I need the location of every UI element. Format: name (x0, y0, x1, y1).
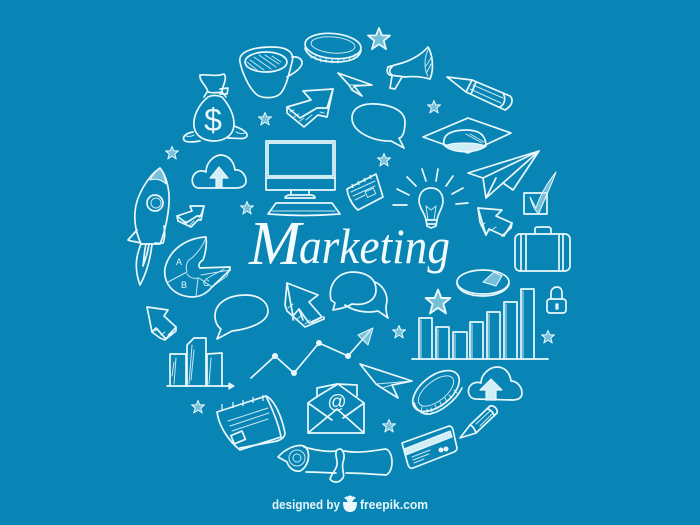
icon: pencil top right (447, 77, 512, 110)
title: Marketing: arketing (299, 218, 450, 274)
icon: ABC pie chart: B (181, 280, 187, 290)
icon: star big center right (426, 290, 450, 313)
line chart with arrow (251, 328, 373, 378)
icon: ABC pie chart (165, 237, 230, 297)
icon: freepik logo (343, 496, 357, 512)
icon: star under pencil (428, 100, 440, 113)
title: Marketing: M (248, 210, 304, 278)
icon: credit card (402, 426, 457, 468)
icon: pencil bottom (460, 406, 497, 438)
icon: star near bulb (378, 154, 390, 166)
icon: star bottom small (192, 400, 204, 413)
icon: coin bottom (405, 363, 467, 419)
icon: large paper plane (468, 151, 539, 198)
keyboard (268, 203, 340, 216)
icon: light bulb (393, 169, 468, 228)
icon: star by envelope (382, 420, 396, 432)
icon: graduation cap (423, 118, 511, 153)
footer: attribution (272, 496, 428, 512)
icon: speech bubble top (352, 104, 405, 148)
icon: speech bubble left (215, 295, 268, 339)
icon: money bag (183, 74, 247, 142)
icon: calendar small (347, 174, 383, 210)
title: Marketing (248, 210, 450, 278)
icon: double speech bubble (330, 272, 388, 318)
pie labels: A (176, 257, 182, 267)
icon: arrow right side (478, 208, 512, 236)
icon: checkbox (524, 172, 556, 214)
icon: star by bars right (542, 330, 554, 343)
bar chart: small left (167, 338, 234, 389)
icon: coin top (304, 31, 362, 63)
icon: scroll diploma (278, 446, 392, 482)
icon: star near monitor (240, 202, 254, 214)
icon: star left (166, 146, 178, 159)
icon: cloud upload right (468, 367, 522, 400)
icon: calendar large (217, 395, 285, 450)
icon: left arrow (147, 307, 176, 340)
icon: rocket (128, 168, 169, 285)
icon: star top (368, 28, 390, 49)
icon: paper plane bottom (360, 364, 412, 398)
footer: attribution: freepik.com (360, 497, 428, 512)
icon: padlock (547, 287, 566, 313)
icon: briefcase (515, 227, 570, 271)
icon: 3D arrow top (287, 89, 333, 127)
icon: money bag: $ (204, 102, 222, 138)
icon: cloud upload left (192, 155, 246, 188)
icon: star near bag (258, 112, 272, 125)
icon: envelope with at sign (308, 384, 364, 433)
footer: attribution: designed by (272, 498, 340, 512)
icon: small paper plane (338, 73, 372, 96)
icon: ABC pie chart: C (203, 278, 210, 288)
bar chart: large right (412, 289, 548, 359)
icon: coffee cup (240, 47, 302, 98)
icon: star by bars left (392, 326, 406, 338)
icon: center arrow (285, 283, 324, 327)
icon: computer monitor (266, 141, 340, 216)
icon: megaphone (387, 47, 432, 89)
icon: pie disc right (457, 270, 509, 296)
icon: envelope with at sign: @ (327, 392, 347, 413)
icon: small arrow by rocket (177, 206, 204, 227)
